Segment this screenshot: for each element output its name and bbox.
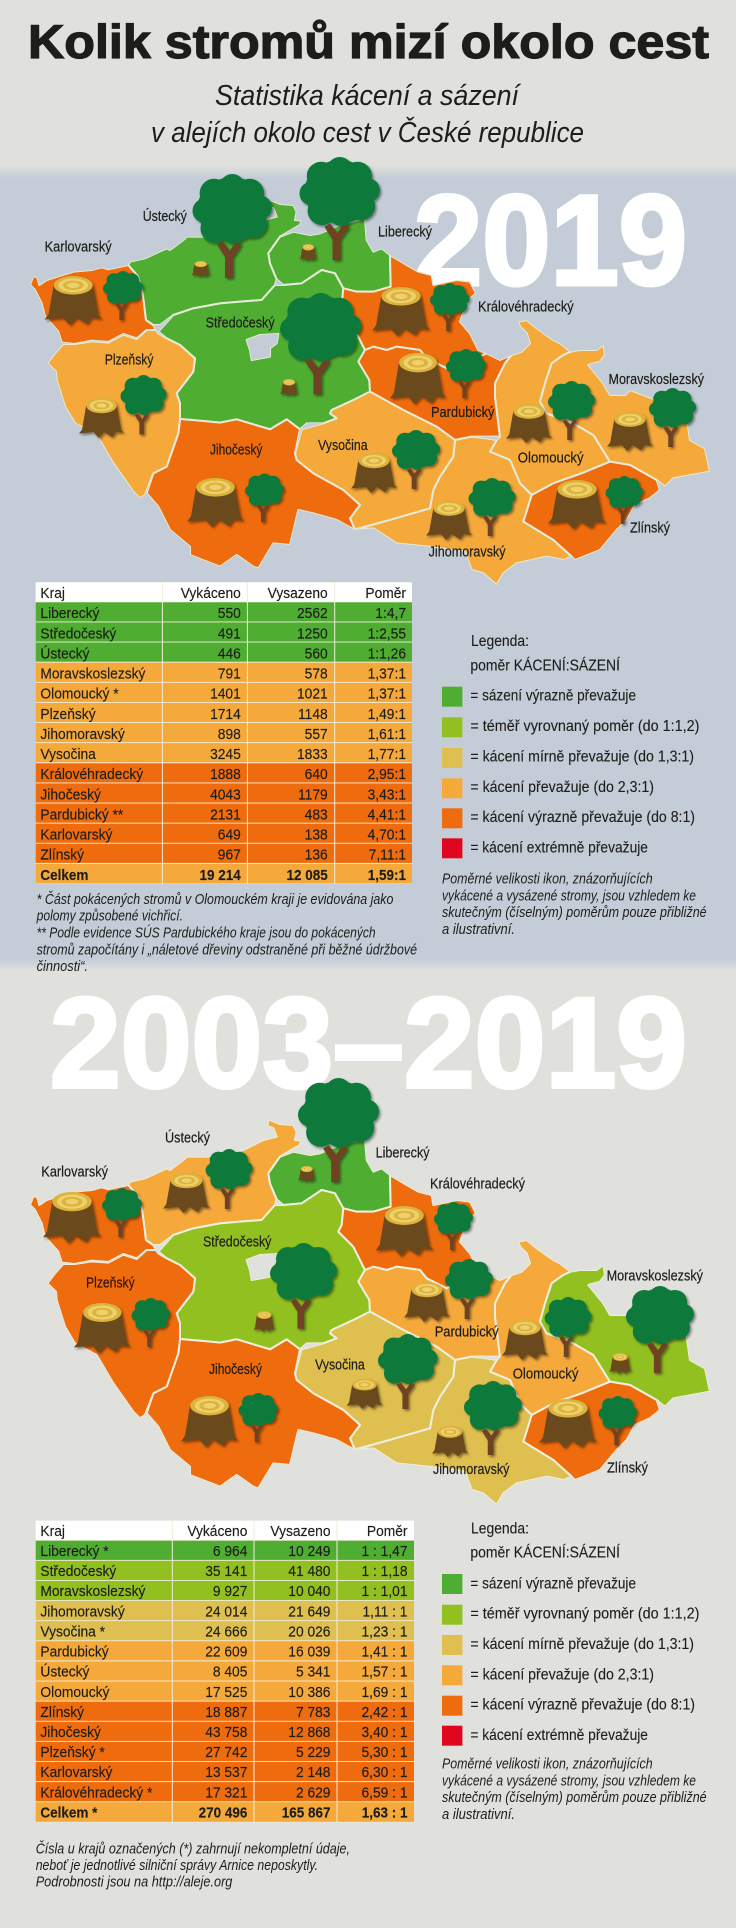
row: Karlovarský: Karlovarský <box>40 827 113 844</box>
icons: Pardubický <box>404 1259 493 1322</box>
row: Středočeský: 1250 <box>297 626 328 642</box>
legend note: 2003–2019 <box>442 1756 707 1823</box>
row: Karlovarský <box>36 1762 414 1781</box>
table header: Vykáceno <box>181 586 241 602</box>
legend item: yellow: = kácení mírně převažuje (do 1,3:1) <box>470 749 694 766</box>
row: Středočeský: 1 : 1,18 <box>361 1564 408 1580</box>
map labels: 2019: Ústecký <box>143 208 187 225</box>
row: Pardubický: 483 <box>305 807 328 824</box>
row: Olomoucký: 10 386 <box>288 1684 331 1701</box>
row: Celkem: 165 867 <box>282 1805 331 1822</box>
row: Plzeňský <box>36 1742 414 1761</box>
legend item: dark orange: = kácení výrazně převažuje (do 8:1) <box>470 809 695 826</box>
row: Vysočina: 3245 <box>210 747 241 763</box>
legend item: yellow: = kácení mírně převažuje (do 1,3:1) <box>470 1636 694 1653</box>
row: Celkem: 270 496 <box>199 1805 247 1822</box>
row: Královéhradecký: 6,59 : 1 <box>361 1785 408 1802</box>
row: Liberecký: Liberecký * <box>40 1544 109 1560</box>
row: Středočeský: Středočeský <box>40 626 117 642</box>
table header: Vykáceno <box>187 1524 247 1540</box>
icons: Zlínský <box>539 1396 637 1448</box>
map labels: 2003–2019: Pardubický <box>435 1324 499 1341</box>
map labels: 2003–2019: Středočeský <box>203 1234 272 1251</box>
row: Jihočeský: Jihočeský <box>40 1725 102 1741</box>
row: Olomoucký: 17 525 <box>205 1684 247 1701</box>
legend item: red <box>442 1726 648 1746</box>
row: Moravskoslezský: 791 <box>218 666 241 683</box>
region: Jihomoravský <box>355 1357 572 1505</box>
icons: Ústecký <box>192 174 272 278</box>
legend item: dark green: = sázení výrazně převažuje <box>470 688 636 705</box>
row: Pardubický: 22 609 <box>205 1644 247 1661</box>
row: Středočeský: 491 <box>218 626 241 642</box>
row: Ústecký: 5 341 <box>296 1664 331 1681</box>
icons: Liberecký <box>298 1078 379 1182</box>
row: Ústecký: 1:1,26 <box>368 646 406 663</box>
row: Ústecký: 560 <box>305 646 328 663</box>
icons: Zlínský <box>548 476 643 529</box>
row: Olomoucký: Olomoucký * <box>40 686 119 703</box>
row: Pardubický <box>36 1641 414 1661</box>
icons: Pardubický <box>390 349 486 404</box>
row: Jihočeský <box>36 1722 414 1741</box>
row: Ústecký <box>36 642 412 663</box>
row: Vysočina: 20 026 <box>288 1624 331 1641</box>
region: Středočeský <box>158 270 370 429</box>
row: Jihočeský: 1179 <box>298 787 328 803</box>
row: Moravskoslezský: 10 040 <box>288 1584 331 1600</box>
map labels: 2003–2019: Ústecký <box>165 1129 210 1146</box>
row: Středočeský: 1:2,55 <box>368 626 406 642</box>
row: Plzeňský: Plzeňský * <box>40 1745 105 1761</box>
legend item: light green: = téměř vyrovnaný poměr (do 1:1,2) <box>470 1606 699 1623</box>
row: Moravskoslezský: 1,37:1 <box>368 666 406 683</box>
row: Středočeský: 35 141 <box>205 1564 247 1580</box>
row: Ústecký: 446 <box>218 646 241 663</box>
region: Královéhradecký <box>338 255 487 368</box>
map labels: 2019: Jihočeský <box>210 442 263 458</box>
row: Středočeský <box>36 622 412 642</box>
row: Celkem <box>36 1802 414 1822</box>
row: Jihomoravský: Jihomoravský <box>40 1604 125 1620</box>
map labels: 2019: Královéhradecký <box>478 298 574 315</box>
row: Královéhradecký: 17 321 <box>205 1785 247 1802</box>
icons: Jihočeský <box>187 474 284 527</box>
row: Plzeňský: 27 742 <box>205 1745 247 1761</box>
row: Středočeský: Středočeský <box>40 1564 117 1580</box>
row: Plzeňský: 1714 <box>210 706 241 723</box>
row: Královéhradecký: 2 629 <box>296 1785 331 1802</box>
icons: Středočeský <box>254 1243 337 1332</box>
row: Královéhradecký: 640 <box>305 767 328 783</box>
row: Jihomoravský: 1,11 : 1 <box>362 1604 408 1620</box>
region: Ústecký <box>128 199 302 325</box>
legend item: dark green: = sázení výrazně převažuje <box>470 1575 636 1592</box>
row: Olomoucký <box>36 1682 414 1701</box>
region: Zlínský <box>523 462 660 560</box>
row: Zlínský: 7,11:1 <box>369 847 406 864</box>
row: Jihočeský: Jihočeský <box>40 787 102 803</box>
row: Zlínský: 967 <box>218 847 241 864</box>
region: Liberecký <box>268 218 391 292</box>
row: Jihočeský: 4043 <box>210 787 241 803</box>
map labels: 2003–2019: Plzeňský <box>86 1274 135 1291</box>
map labels: 2019: Pardubický <box>431 404 495 421</box>
row: Jihomoravský: 24 014 <box>205 1604 247 1620</box>
icons: Karlovarský <box>43 1188 142 1243</box>
region: Karlovarský <box>30 265 156 344</box>
icons: Moravskoslezský <box>607 388 696 451</box>
row: Královéhradecký: Královéhradecký * <box>40 1785 153 1802</box>
row: Jihočeský <box>36 783 412 803</box>
footnotes: 2019: polomy způsobené vichřicí. <box>36 909 183 925</box>
legend item: orange: = kácení převažuje (do 2,3:1) <box>470 779 654 796</box>
footnotes: 2019 <box>36 891 417 975</box>
row: Moravskoslezský: 578 <box>305 666 328 683</box>
table header: Poměr <box>367 1524 408 1540</box>
icons: Plzeňský <box>74 1298 170 1353</box>
row: Zlínský: 18 887 <box>205 1704 247 1721</box>
legend: 2019: poměr KÁCENÍ:SÁZENÍ <box>470 658 621 675</box>
row: Zlínský: Zlínský <box>40 847 85 864</box>
region: Plzeňský <box>47 1250 195 1418</box>
legend: 2019: Legenda: <box>471 633 529 650</box>
footnote: 2003–2019: Čísla u krajů označených (*) zahrnují nekompletní údaje, <box>36 1840 350 1857</box>
icons: Královéhradecký <box>376 1202 473 1256</box>
row: Ústecký: Ústecký <box>40 645 90 663</box>
row: Plzeňský <box>36 703 412 723</box>
map labels: 2003–2019: Zlínský <box>607 1459 648 1476</box>
row: Vysočina: 1,77:1 <box>368 747 406 763</box>
region: Karlovarský <box>30 1185 156 1264</box>
legend note: 2019: Poměrné velikosti ikon, znázorňujících <box>442 871 653 887</box>
row: Pardubický: 4,41:1 <box>368 807 406 824</box>
row: Královéhradecký <box>36 1782 414 1802</box>
row: Karlovarský: 6,30 : 1 <box>361 1765 408 1781</box>
icons: Karlovarský <box>45 271 143 325</box>
row: Pardubický: 2131 <box>210 807 241 824</box>
map icons: 2019 trees and stumps <box>45 157 696 540</box>
map: 2003–2019 regions <box>30 1119 710 1505</box>
region: Vysočina <box>295 1312 455 1449</box>
row: Moravskoslezský: Moravskoslezský <box>40 1584 146 1600</box>
legend note: 2003–2019: Poměrné velikosti ikon, znázorňujících <box>442 1756 653 1772</box>
row: Jihomoravský: 557 <box>305 726 328 743</box>
map labels: 2019: Jihomoravský <box>429 544 506 561</box>
map labels: 2019: Zlínský <box>630 520 670 537</box>
map labels: 2019: Olomoucký <box>518 450 584 466</box>
table header <box>36 582 412 602</box>
map labels: 2019: Vysočina <box>318 437 368 454</box>
row: Středočeský <box>36 1561 414 1580</box>
region: Středočeský <box>158 1190 370 1349</box>
map labels: 2003–2019 <box>41 1129 703 1478</box>
row: Zlínský <box>36 844 412 864</box>
map icons: 2003–2019 trees and stumps <box>43 1078 694 1457</box>
row: Celkem: Celkem <box>40 867 88 884</box>
row: Jihočeský: 3,40 : 1 <box>361 1725 408 1741</box>
row: Moravskoslezský <box>36 1581 414 1600</box>
row: Karlovarský: 2 148 <box>296 1765 331 1781</box>
row: Zlínský: 136 <box>305 847 328 864</box>
row: Jihomoravský: 898 <box>218 726 241 743</box>
region: Vysočina <box>295 392 455 529</box>
region: Ústecký <box>128 1119 302 1245</box>
row: Olomoucký: 1021 <box>297 686 328 703</box>
footnotes: 2019: ** Podle evidence SÚS Pardubického kraje jsou do pokácených <box>37 924 376 941</box>
row: Vysočina: 1833 <box>297 747 328 763</box>
table header: Vysazeno <box>270 1524 331 1540</box>
legend item: dark green <box>442 687 636 707</box>
row: Olomoucký: Olomoucký <box>40 1684 110 1701</box>
row: Plzeňský: 5,30 : 1 <box>361 1745 408 1761</box>
map labels: 2003–2019: Vysočina <box>315 1356 365 1373</box>
row: Jihomoravský: 21 649 <box>288 1604 331 1620</box>
row: Liberecký: 10 249 <box>288 1544 331 1560</box>
legend item: dark orange: = kácení výrazně převažuje (do 8:1) <box>470 1697 695 1714</box>
legend: 2003–2019 <box>442 1520 699 1746</box>
icons: Liberecký <box>300 157 380 261</box>
table header: Kraj <box>40 586 65 602</box>
icons: Plzeňský <box>79 375 166 438</box>
row: Celkem: 1,59:1 <box>368 867 406 884</box>
row: Celkem <box>36 864 412 884</box>
region: Zlínský <box>523 1382 660 1480</box>
row: Jihočeský: 3,43:1 <box>368 787 406 803</box>
region: Jihočeský <box>147 1339 360 1488</box>
map labels: 2019: Moravskoslezský <box>608 371 704 388</box>
icons: Jihočeský <box>181 1393 278 1447</box>
map labels: 2019: Středočeský <box>206 314 275 331</box>
row: Olomoucký: 1,69 : 1 <box>361 1684 408 1701</box>
row: Jihomoravský <box>36 1601 414 1620</box>
icons: Jihomoravský <box>426 478 516 540</box>
map labels: 2003–2019: Moravskoslezský <box>607 1268 703 1285</box>
table: 2019 <box>36 582 412 884</box>
row: Liberecký: 6 964 <box>213 1544 247 1560</box>
footnotes: 2019: * Část pokácených stromů v Olomouckém kraji je evidována jako <box>37 891 393 908</box>
region: Jihočeský <box>147 419 360 568</box>
row: Celkem: Celkem * <box>40 1805 98 1822</box>
legend item: red: = kácení extrémně převažuje <box>470 840 648 857</box>
row: Královéhradecký: 2,95:1 <box>368 767 406 783</box>
map labels: 2019: Liberecký <box>378 223 432 240</box>
row: Karlovarský: 138 <box>305 827 328 844</box>
region: Královéhradecký <box>338 1175 487 1288</box>
row: Vysočina <box>36 743 412 763</box>
legend item: orange <box>442 1665 654 1685</box>
row: Zlínský: Zlínský <box>40 1704 85 1721</box>
row: Karlovarský: 649 <box>218 827 241 844</box>
legend: 2019 <box>442 633 699 858</box>
row: Ústecký: 1,57 : 1 <box>361 1664 408 1681</box>
map labels: 2003–2019: Liberecký <box>376 1144 430 1161</box>
region: Olomoucký <box>490 320 610 495</box>
row: Karlovarský: Karlovarský <box>40 1765 113 1781</box>
region: Jihomoravský <box>355 437 572 585</box>
row: Královéhradecký: 1888 <box>210 767 241 783</box>
row: Liberecký: 1:4,7 <box>375 606 406 622</box>
table: 2003–2019 <box>36 1521 414 1822</box>
row: Celkem: 1,63 : 1 <box>362 1805 408 1822</box>
map labels: 2003–2019: Jihomoravský <box>433 1461 510 1478</box>
table header <box>36 1521 414 1540</box>
icons: Olomoucký <box>502 1297 592 1360</box>
region: Liberecký <box>268 1138 391 1212</box>
legend note: 2003–2019: a ilustrativní. <box>442 1807 515 1823</box>
row: Jihomoravský: 1,61:1 <box>368 726 406 743</box>
table header: Poměr <box>365 586 406 602</box>
row: Vysočina: 1,23 : 1 <box>361 1624 408 1641</box>
legend item: light green: = téměř vyrovnaný poměr (do 1:1,2) <box>470 718 699 735</box>
icons: Moravskoslezský <box>609 1286 694 1374</box>
icons: Jihomoravský <box>432 1381 522 1457</box>
row: Celkem: 12 085 <box>286 867 328 884</box>
region: Olomoucký <box>490 1240 610 1415</box>
icons: Středočeský <box>280 293 362 396</box>
map labels: 2003–2019: Karlovarský <box>41 1164 108 1181</box>
row: Liberecký: 2562 <box>297 606 328 622</box>
row: Moravskoslezský: Moravskoslezský <box>40 666 146 683</box>
map labels: 2019: Plzeňský <box>105 352 154 369</box>
region: Pardubický <box>358 347 512 440</box>
row: Vysočina: 24 666 <box>205 1624 247 1641</box>
row: Jihomoravský: Jihomoravský <box>40 726 125 743</box>
row: Moravskoslezský <box>36 663 412 683</box>
footnotes: 2019: stromů započítány i „náletové dřeviny odstraněné při běžné údržbové <box>37 942 417 958</box>
row: Jihomoravský <box>36 723 412 743</box>
row: Liberecký <box>36 602 412 622</box>
row: Pardubický: 1,41 : 1 <box>361 1644 408 1661</box>
row: Pardubický <box>36 804 412 824</box>
legend item: red: = kácení extrémně převažuje <box>470 1727 648 1744</box>
footnotes: 2019: činnosti“. <box>37 959 88 975</box>
heading: 2019: 2019 <box>414 170 687 312</box>
region: Pardubický <box>358 1267 512 1360</box>
row: Jihočeský: 12 868 <box>288 1725 331 1741</box>
region: Moravskoslezský <box>540 345 710 487</box>
map: 2019 regions <box>30 199 710 585</box>
row: Karlovarský: 4,70:1 <box>368 827 406 844</box>
legend item: orange: = kácení převažuje (do 2,3:1) <box>470 1666 654 1683</box>
row: Liberecký: 1 : 1,47 <box>361 1544 408 1560</box>
row: Středočeský: 41 480 <box>288 1564 331 1580</box>
region: Moravskoslezský <box>540 1265 710 1407</box>
row: Vysočina: Vysočina <box>40 747 97 763</box>
row: Liberecký: Liberecký <box>40 606 100 622</box>
legend note: 2019: a ilustrativní. <box>442 922 515 938</box>
icons: Vysočina <box>346 1334 438 1409</box>
row: Královéhradecký: Královéhradecký <box>40 767 144 783</box>
footnote: 2003–2019 <box>36 1840 350 1891</box>
legend item: dark green <box>442 1574 636 1594</box>
row: Liberecký: 550 <box>218 606 241 622</box>
legend item: orange <box>442 778 654 798</box>
row: Olomoucký <box>36 683 412 703</box>
legend: 2003–2019: Legenda: <box>471 1520 529 1537</box>
row: Zlínský <box>36 1702 414 1721</box>
subtitle: v alejích okolo cest v České republice <box>151 115 584 149</box>
heading: 2003–2019: 2003–2019 <box>50 972 687 1115</box>
legend: 2003–2019: poměr KÁCENÍ:SÁZENÍ <box>470 1545 621 1562</box>
row: Karlovarský <box>36 824 412 844</box>
icons: Vysočina <box>351 430 440 493</box>
row: Ústecký <box>36 1661 414 1681</box>
map labels: 2003–2019: Jihočeský <box>209 1361 262 1378</box>
row: Moravskoslezský: 9 927 <box>213 1584 247 1600</box>
row: Královéhradecký <box>36 763 412 783</box>
row: Liberecký <box>36 1541 414 1560</box>
footnote: 2003–2019: neboť je jednotlivé silniční správy Arnice neposkytly. <box>36 1858 318 1874</box>
region: Plzeňský <box>47 330 195 498</box>
row: Plzeňský: 1148 <box>298 706 328 723</box>
icons: Ústecký <box>163 1149 253 1213</box>
row: Vysočina <box>36 1621 414 1641</box>
footnote: 2003–2019: Podrobnosti jsou na http://aleje.org <box>36 1875 232 1891</box>
subtitle: Statistika kácení a sázení <box>215 80 522 112</box>
row: Vysočina: Vysočina * <box>40 1624 105 1641</box>
row: Plzeňský: 1,49:1 <box>368 706 406 723</box>
subtitle <box>151 80 584 149</box>
table header: Kraj <box>40 1524 65 1540</box>
row: Olomoucký: 1401 <box>210 686 241 703</box>
row: Ústecký: Ústecký <box>40 1663 90 1681</box>
map labels: 2019 <box>45 208 704 561</box>
row: Olomoucký: 1,37:1 <box>368 686 406 703</box>
row: Ústecký: 8 405 <box>213 1664 247 1681</box>
row: Pardubický: 16 039 <box>288 1644 331 1661</box>
row: Pardubický: Pardubický ** <box>40 807 124 824</box>
legend note: 2019 <box>442 871 707 938</box>
row: Zlínský: 2,42 : 1 <box>361 1704 408 1721</box>
row: Pardubický: Pardubický <box>40 1644 109 1661</box>
row: Plzeňský: 5 229 <box>296 1745 331 1761</box>
row: Jihočeský: 43 758 <box>205 1725 247 1741</box>
map labels: 2003–2019: Královéhradecký <box>430 1175 525 1192</box>
row: Moravskoslezský: 1 : 1,01 <box>361 1584 408 1600</box>
row: Celkem: 19 214 <box>200 867 241 884</box>
icons: Královéhradecký <box>372 283 470 336</box>
map labels: 2003–2019: Olomoucký <box>513 1365 579 1382</box>
legend item: red <box>442 838 648 858</box>
row: Plzeňský: Plzeňský <box>40 706 96 723</box>
row: Zlínský: 7 783 <box>296 1704 331 1721</box>
title: Kolik stromů mizí okolo cest <box>28 15 709 68</box>
row: Karlovarský: 13 537 <box>205 1765 247 1781</box>
icons: Olomoucký <box>506 381 595 443</box>
map labels: 2019: Karlovarský <box>45 239 112 256</box>
table header: Vysazeno <box>268 586 328 602</box>
